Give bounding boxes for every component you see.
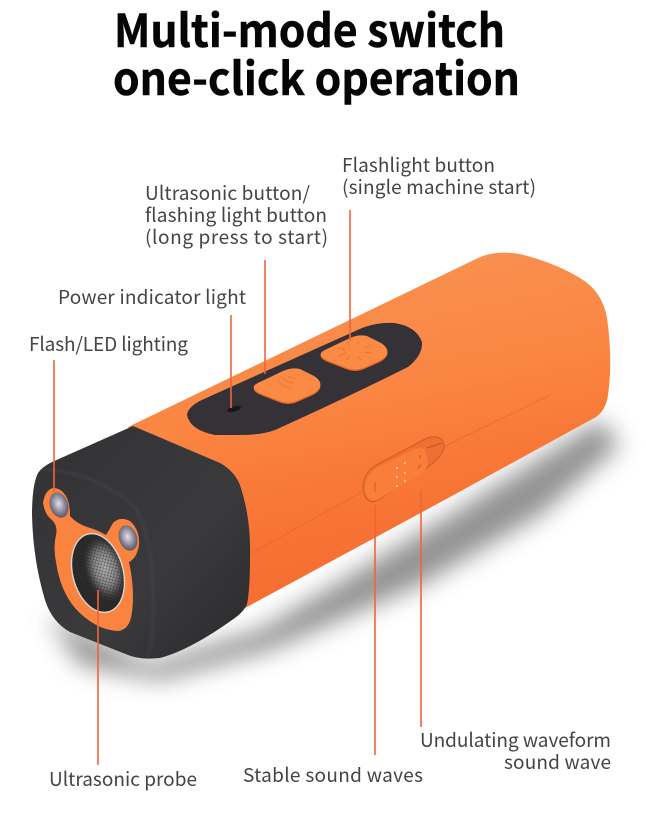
orange lens surround [43,488,139,631]
title: one-click operation [113,43,520,108]
right LED [115,523,141,553]
device body [128,253,610,608]
ultrasonic probe lens [62,527,134,619]
label: stable sound waves: Stable sound waves [243,761,423,788]
title [113,0,520,108]
control panel [187,323,422,435]
label: power indicator light: Power indicator light [58,283,246,310]
label: flashlight button: (single machine start) [342,173,536,200]
label: ultrasonic probe: Ultrasonic probe [49,765,197,792]
label: flashlight button [342,151,536,200]
label: flash LED lighting: Flash/LED lighting [29,330,188,357]
product: ultrasonic device [32,253,610,659]
flashlight button [321,335,387,371]
label: undulating waveform sound wave: Undulating waveform [420,726,611,753]
slide switch [363,437,444,502]
power indicator light [227,405,241,413]
label: ultrasonic button: Ultrasonic button/ [145,179,311,206]
callout lines [54,210,421,765]
label: ultrasonic button: flashing light button [145,201,327,228]
label: ultrasonic button: (long press to start) [145,223,328,250]
body seam [252,395,550,553]
left LED [46,490,72,520]
label: undulating waveform sound wave [420,726,611,775]
label: ultrasonic button [145,179,328,250]
ultrasonic button [254,368,320,404]
label: flashlight button: Flashlight button [342,151,495,178]
black front cap [32,426,250,659]
device shadow [48,420,620,680]
front face edge [42,470,153,656]
label: undulating waveform sound wave: sound wave [504,748,611,775]
